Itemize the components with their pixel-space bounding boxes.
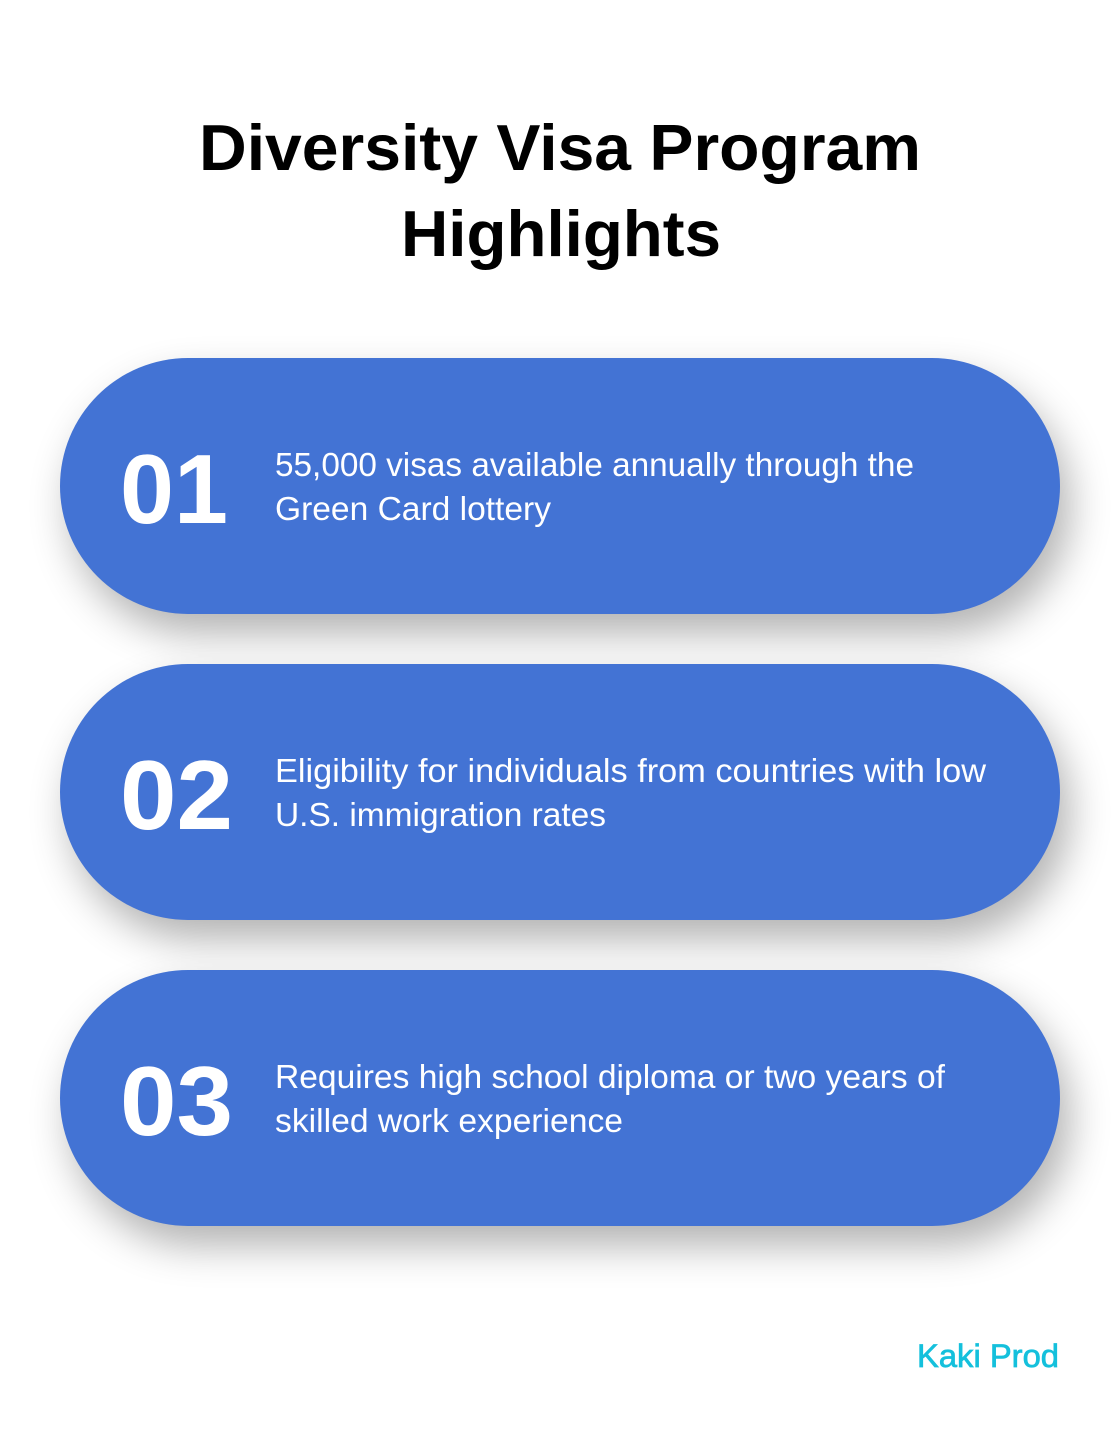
title: Highlights bbox=[401, 197, 721, 270]
text: item 3 bbox=[275, 1058, 946, 1139]
text: item 1 bbox=[275, 446, 914, 527]
logo: Kaki Prod: Kaki Prod bbox=[917, 1338, 1059, 1374]
text: item 2: Eligibility for individuals from countries with low bbox=[275, 752, 986, 789]
text: item 1: Green Card lottery bbox=[275, 490, 551, 527]
title bbox=[199, 111, 921, 270]
number 02: 02 bbox=[120, 740, 233, 850]
title: Diversity Visa Program bbox=[199, 111, 921, 184]
panel: card 1 bbox=[60, 358, 1060, 614]
panel: card 2 bbox=[60, 664, 1060, 920]
number 01: 01 bbox=[120, 434, 228, 544]
text: item 3: skilled work experience bbox=[275, 1102, 623, 1139]
text: item 1: 55,000 visas available annually through the bbox=[275, 446, 914, 483]
panel: card 3 bbox=[60, 970, 1060, 1226]
text: item 2: U.S. immigration rates bbox=[275, 796, 606, 833]
text: item 3: Requires high school diploma or two years of bbox=[275, 1058, 946, 1095]
number 03: 03 bbox=[120, 1046, 233, 1156]
text: item 2 bbox=[275, 752, 986, 833]
